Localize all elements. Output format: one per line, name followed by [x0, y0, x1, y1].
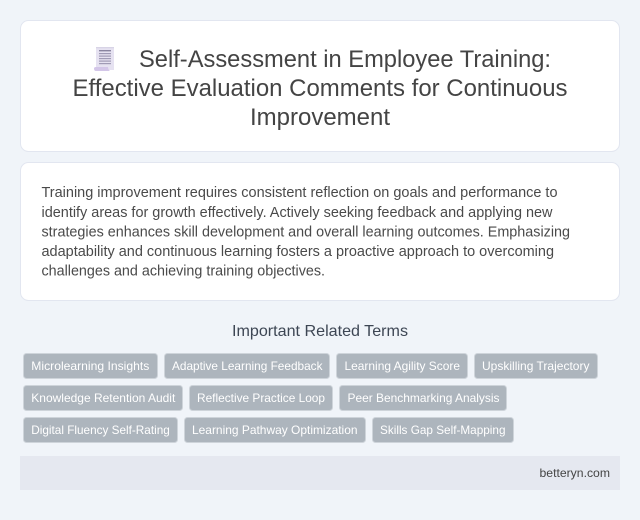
- text block: description: identify areas for growth effectively. Actively seeking feedback and applying new: [42, 205, 553, 221]
- title: Improvement: [250, 104, 390, 131]
- chip: Skills Gap Self-Mapping: [372, 418, 514, 442]
- text block: description: strategies enhances skill development and overall learning outcomes. Emphasizing: [42, 224, 570, 240]
- chip: Knowledge Retention Audit: [24, 386, 182, 410]
- chip: Knowledge Retention Audit: Knowledge Retention Audit: [31, 391, 176, 405]
- chip: Upskilling Trajectory: Upskilling Trajectory: [482, 359, 590, 373]
- chip: Peer Benchmarking Analysis: Peer Benchmarking Analysis: [348, 391, 500, 405]
- related terms chips: [24, 354, 598, 442]
- chip: Digital Fluency Self-Rating: Digital Fluency Self-Rating: [31, 423, 170, 437]
- text block: description: adaptability and continuous learning fosters a proactive approach to overcoming: [42, 244, 554, 260]
- chip: Adaptive Learning Feedback: [164, 354, 330, 378]
- chip: Microlearning Insights: [24, 354, 158, 378]
- chip: Reflective Practice Loop: Reflective Practice Loop: [197, 391, 325, 405]
- panel: description card: [20, 162, 620, 300]
- chip: Digital Fluency Self-Rating: [24, 418, 178, 442]
- text block: description: challenges and achieving training objectives.: [42, 264, 325, 280]
- chip: Peer Benchmarking Analysis: [340, 386, 506, 410]
- chip: Learning Agility Score: [336, 354, 468, 378]
- text block: description: Training improvement requires consistent reflection on goals and performance to: [42, 185, 558, 201]
- icon: scroll document: [94, 47, 114, 71]
- title: [72, 46, 568, 131]
- chip: Adaptive Learning Feedback: Adaptive Learning Feedback: [172, 359, 323, 373]
- heading: related terms: Important Related Terms: [232, 323, 408, 340]
- footer bar: [20, 456, 620, 490]
- chip: Learning Agility Score: Learning Agility Score: [344, 359, 460, 373]
- footer: site name: betteryn.com: [540, 466, 610, 480]
- chip: Microlearning Insights: Microlearning Insights: [31, 359, 149, 373]
- chip: Upskilling Trajectory: [474, 354, 598, 378]
- panel: title card: [20, 20, 620, 152]
- title: Effective Evaluation Comments for Continuous: [72, 75, 568, 102]
- chip: Learning Pathway Optimization: Learning Pathway Optimization: [192, 423, 358, 437]
- text block: description: [42, 185, 570, 280]
- chip: Skills Gap Self-Mapping: Skills Gap Self-Mapping: [380, 423, 506, 437]
- title: Self-Assessment in Employee Training:: [139, 46, 551, 73]
- chip: Learning Pathway Optimization: [184, 418, 366, 442]
- chip: Reflective Practice Loop: [190, 386, 332, 410]
